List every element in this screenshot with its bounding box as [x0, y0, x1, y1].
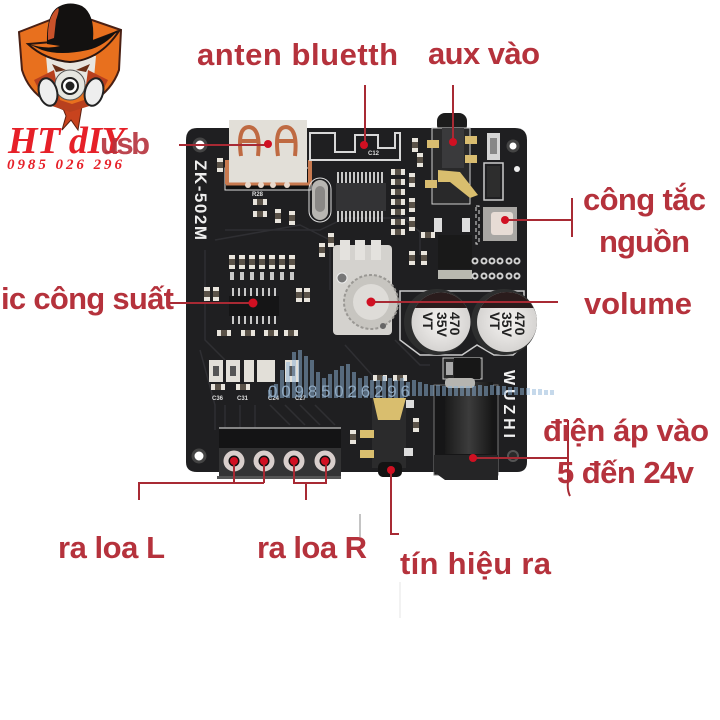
small components top: R28 — [252, 192, 264, 198]
USB port — [225, 120, 312, 190]
capacitor outlines — [400, 291, 524, 355]
label: power switch: công tắc — [583, 181, 706, 217]
mounting holes — [193, 139, 518, 462]
traces — [200, 215, 430, 430]
inductors and capacitors lower left — [209, 360, 307, 402]
power amplifier IC area — [204, 255, 310, 336]
label: power switch line 2: nguồn — [599, 224, 690, 259]
inductors and capacitors lower left: C27 — [295, 396, 307, 402]
capacitor 470uF 35V right: VT — [487, 312, 503, 330]
brand name HT dIY: HT dIY — [7, 120, 129, 162]
inductors and capacitors lower left: C36 — [212, 396, 224, 402]
bluetooth antenna — [310, 133, 400, 160]
audio in jack — [425, 113, 478, 204]
capacitor 470uF 35V left: 35V — [434, 312, 450, 338]
power switch — [476, 206, 517, 244]
label: input voltage: điện áp vào — [543, 413, 709, 448]
inductors and capacitors lower left: C31 — [237, 396, 249, 402]
phone number: 0985 026 296 — [7, 157, 122, 173]
voltage regulator and header holes — [434, 218, 520, 279]
capacitor 470uF 35V right: 470 — [512, 312, 528, 336]
capacitor 470uF 35V left — [404, 289, 474, 355]
board: ZK-502M PCB — [186, 128, 527, 472]
capacitor 470uF 35V left: VT — [420, 312, 436, 330]
label: power IC: ic công suất — [1, 281, 174, 316]
capacitor 470uF 35V right — [471, 289, 540, 355]
label: bluetooth antenna: anten bluetth — [197, 37, 398, 72]
speaker terminal block — [217, 428, 341, 479]
label: aux in: aux vào — [428, 36, 540, 71]
label: volume: volume — [584, 286, 692, 321]
capacitor 470uF 35V right: 35V — [499, 312, 515, 338]
label: right speaker: ra loa R — [257, 530, 367, 565]
watermark waveform with phone number: 00985026296 — [268, 382, 410, 401]
board name: ZK-502M — [191, 160, 210, 240]
capacitor 470uF 35V left: 470 — [447, 312, 463, 336]
watermark waveform with phone number — [268, 350, 554, 401]
label: input voltage range: 5 đến 24v — [557, 455, 695, 490]
callout lines and dots — [139, 85, 572, 618]
signal output jack — [350, 375, 419, 477]
volume potentiometer — [333, 240, 398, 335]
label: usb: usb — [100, 126, 150, 161]
label: signal out: tín hiệu ra — [400, 546, 552, 581]
label: left speaker: ra loa L — [58, 530, 165, 565]
brand name: WUZHI — [500, 370, 517, 438]
diodes near jack — [484, 133, 520, 200]
inductors and capacitors lower left: C24 — [268, 396, 280, 402]
crystal — [309, 178, 331, 222]
bluetooth chip — [336, 172, 386, 222]
small components top: C12 — [368, 151, 380, 157]
DC power jack — [434, 378, 498, 480]
bottom diode — [443, 358, 482, 379]
logo: HT DIY masked cowboy — [19, 4, 121, 130]
small components top — [217, 138, 435, 265]
